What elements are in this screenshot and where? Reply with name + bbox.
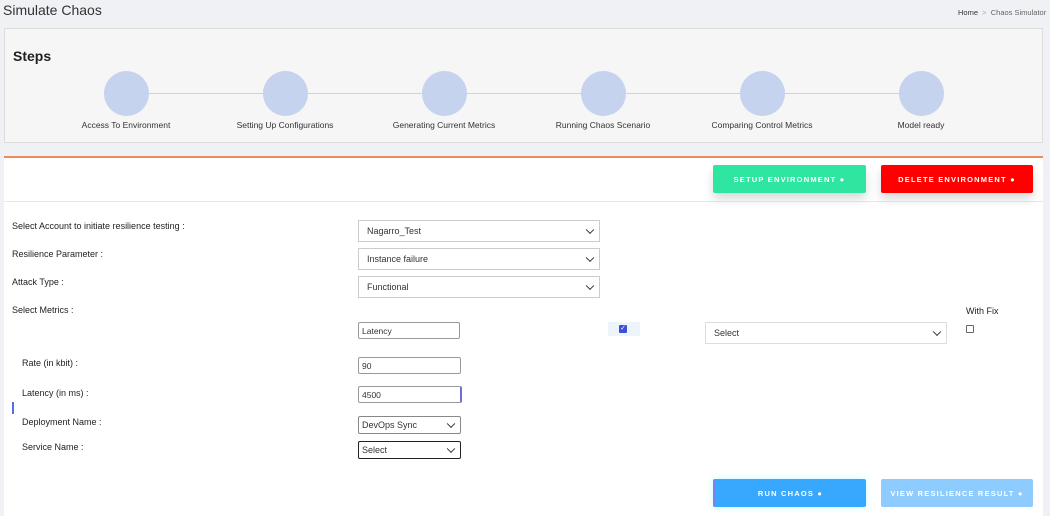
select: deployment: DevOps Sync [362,420,417,430]
form labels: Select Account to initiate resilience testing : [12,221,185,231]
text: Service Name : [22,442,84,452]
text: Latency (in ms) : [22,388,89,398]
button: delete environment [881,165,1033,193]
button: run chaos [713,479,866,507]
step 3 [393,71,495,130]
input: latency metric [358,322,460,339]
step 5: Comparing Control Metrics [711,120,813,130]
select: attack type [358,276,600,298]
text: Attack Type : [12,277,64,287]
step 5 [711,71,813,130]
steps heading: Steps [13,48,51,64]
panel: form card [4,156,1043,516]
select: account [358,220,600,242]
step 1: Access To Environment [82,120,170,130]
text: Select Metrics : [12,305,74,315]
select: deployment [358,416,461,434]
select: account: Nagarro_Test [367,226,421,236]
step 6 [898,71,944,130]
labels: indented: Rate (in kbit) : [22,358,78,368]
select: resilience parameter: Instance failure [367,254,428,264]
input: rate: 90 [362,360,371,370]
button: run chaos: RUN CHAOS ● [758,488,823,498]
step 1 [82,71,170,130]
step 6: Model ready [898,120,944,130]
select: metric option: Select [714,328,739,338]
input: latency [358,386,462,403]
step 2 [237,71,334,130]
step 2: Setting Up Configurations [237,120,333,130]
select: attack type: Functional [367,282,409,292]
button: delete environment: DELETE ENVIRONMENT ● [898,174,1016,184]
select: resilience parameter [358,248,600,270]
checkbox checked [608,322,640,336]
step 3: Generating Current Metrics [393,120,495,130]
input: latency metric: Latency [362,326,392,336]
title: Simulate Chaos [3,2,102,18]
select: service: Select [362,445,387,455]
input: latency: 4500 [362,390,381,400]
text: Deployment Name : [22,417,102,427]
input: rate [358,357,461,374]
checkbox checked: ✓ [620,325,626,332]
button: setup environment [713,165,866,193]
step 4: Running Chaos Scenario [556,120,650,130]
text: Resilience Parameter : [12,249,103,259]
button: setup environment: SETUP ENVIRONMENT ● [734,174,845,184]
select: service [358,441,461,459]
button: view resilience result: VIEW RESILIENCE RESULT ● [890,488,1024,498]
panel: steps [4,28,1043,143]
select: metric option [705,322,947,344]
step 4 [556,71,650,130]
breadcrumb: Home > Chaos Simulator [958,8,1046,17]
with fix: With Fix [966,306,998,316]
button: view resilience result [881,479,1033,507]
